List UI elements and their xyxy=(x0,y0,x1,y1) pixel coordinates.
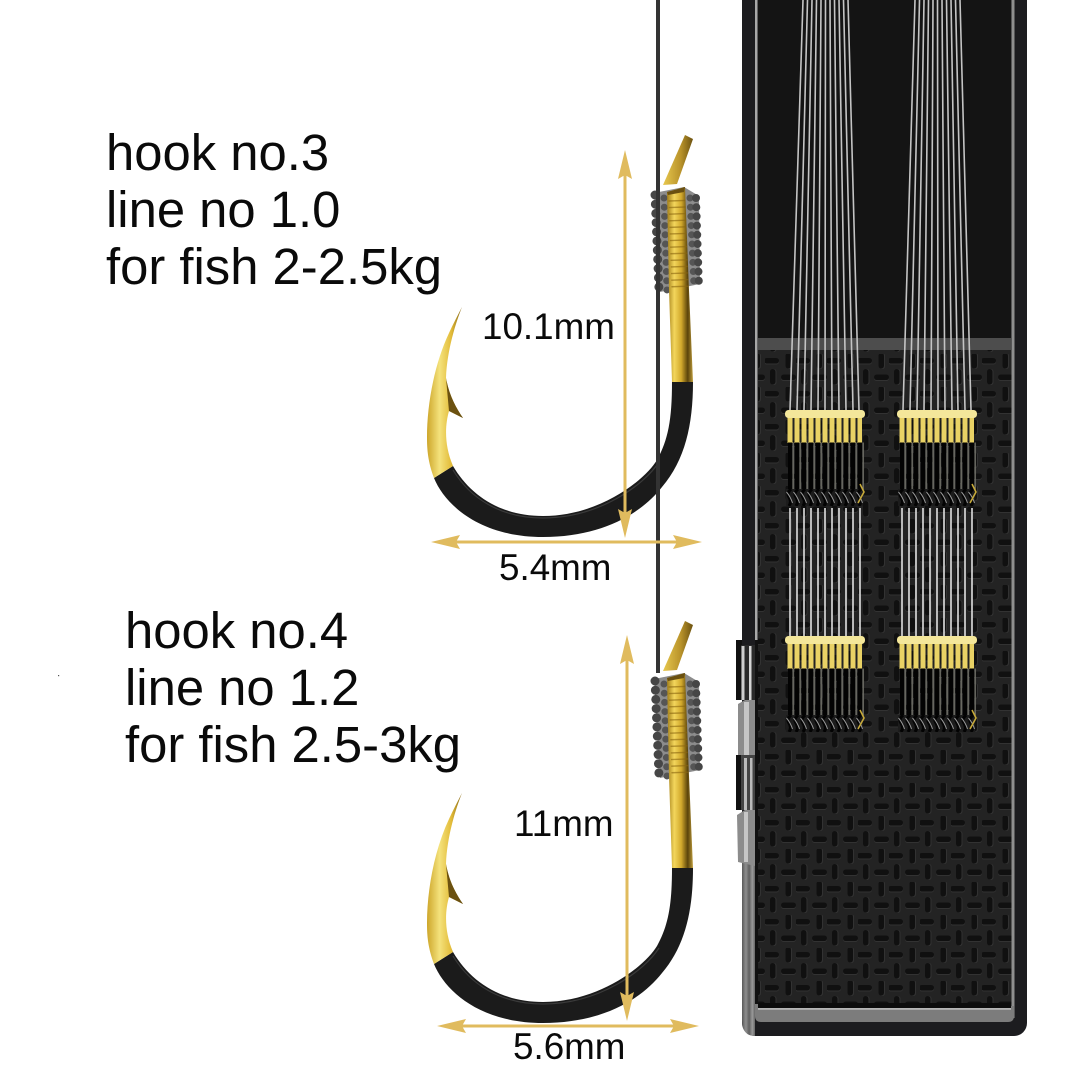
arrow: hook no.4 width xyxy=(437,1019,699,1033)
box hinges xyxy=(736,640,755,866)
leaders, middle bundles xyxy=(790,508,972,636)
text block: hook no.4 specification: line no 1.2 xyxy=(125,659,359,716)
panel bottom lip xyxy=(755,1003,1014,1022)
icon: hook no.4 illustration xyxy=(427,621,700,1023)
text block: hook no.3 specification: hook no.3 xyxy=(106,124,329,181)
fishing line xyxy=(656,0,660,673)
leaders, top-right bundle xyxy=(903,0,971,410)
label: 5.6mm: 5.6mm xyxy=(513,1026,625,1067)
box body xyxy=(742,0,1027,1036)
leaders, top-left bundle xyxy=(790,0,859,410)
arrow: hook no.4 height xyxy=(620,635,634,1021)
text block: hook no.4 specification: for fish 2.5-3kg xyxy=(125,716,461,773)
arrow: hook no.3 width xyxy=(431,535,702,549)
panel: hook storage box xyxy=(736,0,1027,1036)
panel top lip xyxy=(758,338,1011,350)
hook row: bottom left xyxy=(785,636,866,732)
label: 5.4mm: 5.4mm xyxy=(499,547,611,588)
tiny speck xyxy=(58,675,59,676)
arrow: hook no.3 height xyxy=(618,150,632,538)
text block: hook no.3 specification: line no 1.0 xyxy=(106,181,340,238)
lower left rail xyxy=(742,860,755,1036)
icon: hook no.3 illustration xyxy=(427,135,700,537)
text block: hook no.4 specification: hook no.4 xyxy=(125,602,348,659)
hook row: top right xyxy=(897,410,978,506)
label: 10.1mm: 10.1mm xyxy=(482,306,615,347)
text block: hook no.3 specification: for fish 2-2.5kg xyxy=(106,238,442,295)
side guide lines xyxy=(755,0,1014,1018)
text block: hook no.4 specification xyxy=(125,602,461,773)
hook row: top left xyxy=(785,410,866,506)
upper dark window xyxy=(758,0,1011,340)
textured tread panel xyxy=(758,350,1012,1004)
label: 11mm: 11mm xyxy=(514,803,614,844)
hook row: bottom right xyxy=(897,636,978,732)
text block: hook no.3 specification xyxy=(106,124,442,295)
